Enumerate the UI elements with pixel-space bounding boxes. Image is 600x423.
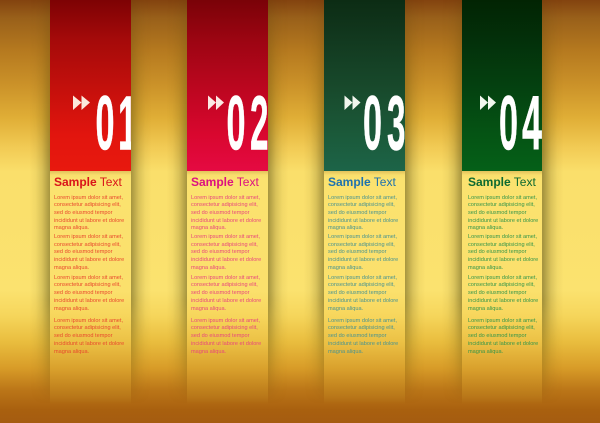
heading 04: Sample Text xyxy=(468,175,536,189)
banner 04: 0 xyxy=(499,80,518,166)
text block 01-1: Lorem ipsum dolor sit amet, consectetur adipisicing elit, sed do eiusmod tempor incididunt ut labore et dolore magna aliqua. xyxy=(54,194,124,231)
text block 04-3: Lorem ipsum dolor sit amet, consectetur adipisicing elit, sed do eiusmod tempor incididunt ut labore et dolore magna aliqua. xyxy=(468,275,538,312)
paper strip 01 xyxy=(50,171,131,404)
text block 03-3: Lorem ipsum dolor sit amet, consectetur adipisicing elit, sed do eiusmod tempor incididunt ut labore et dolore magna aliqua. xyxy=(328,275,398,312)
text block 01-3: Lorem ipsum dolor sit amet, consectetur adipisicing elit, sed do eiusmod tempor incididunt ut labore et dolore magna aliqua. xyxy=(54,275,124,312)
text block 02-1: Lorem ipsum dolor sit amet, consectetur adipisicing elit, sed do eiusmod tempor incididunt ut labore et dolore magna aliqua. xyxy=(191,194,261,231)
banner 02 xyxy=(187,0,268,171)
text block 04-4: Lorem ipsum dolor sit amet, consectetur adipisicing elit, sed do eiusmod tempor incididunt ut labore et dolore magna aliqua. xyxy=(468,318,538,355)
panel: column 02 xyxy=(187,0,268,399)
banner 01 xyxy=(50,0,131,171)
banner 03: 0 xyxy=(363,80,382,166)
panel: column 04 xyxy=(462,0,542,399)
heading 02: Sample Text xyxy=(191,175,259,189)
paper strip 04 xyxy=(462,171,542,404)
text block 02-3: Lorem ipsum dolor sit amet, consectetur adipisicing elit, sed do eiusmod tempor incididunt ut labore et dolore magna aliqua. xyxy=(191,275,261,312)
text block 02-2: Lorem ipsum dolor sit amet, consectetur adipisicing elit, sed do eiusmod tempor incididunt ut labore et dolore magna aliqua. xyxy=(191,234,261,271)
paper strip 02 xyxy=(187,171,268,404)
paper strip 03 xyxy=(324,171,405,404)
panel: column 01 xyxy=(50,0,131,399)
banner 04 xyxy=(462,0,542,171)
text block 01-4: Lorem ipsum dolor sit amet, consectetur adipisicing elit, sed do eiusmod tempor incididunt ut labore et dolore magna aliqua. xyxy=(54,318,124,355)
text block 03-2: Lorem ipsum dolor sit amet, consectetur adipisicing elit, sed do eiusmod tempor incididunt ut labore et dolore magna aliqua. xyxy=(328,234,398,271)
text block 02-4: Lorem ipsum dolor sit amet, consectetur adipisicing elit, sed do eiusmod tempor incididunt ut labore et dolore magna aliqua. xyxy=(191,318,261,355)
heading 01: Sample Text xyxy=(54,175,122,189)
text block 03-4: Lorem ipsum dolor sit amet, consectetur adipisicing elit, sed do eiusmod tempor incididunt ut labore et dolore magna aliqua. xyxy=(328,318,398,355)
text block 01-2: Lorem ipsum dolor sit amet, consectetur adipisicing elit, sed do eiusmod tempor incididunt ut labore et dolore magna aliqua. xyxy=(54,234,124,271)
heading 03: Sample Text xyxy=(328,175,396,189)
panel: column 03 xyxy=(324,0,405,399)
text block 03-1: Lorem ipsum dolor sit amet, consectetur adipisicing elit, sed do eiusmod tempor incididunt ut labore et dolore magna aliqua. xyxy=(328,194,398,231)
text block 04-1: Lorem ipsum dolor sit amet, consectetur adipisicing elit, sed do eiusmod tempor incididunt ut labore et dolore magna aliqua. xyxy=(468,194,538,231)
text block 04-2: Lorem ipsum dolor sit amet, consectetur adipisicing elit, sed do eiusmod tempor incididunt ut labore et dolore magna aliqua. xyxy=(468,234,538,271)
banner 03 xyxy=(324,0,405,171)
